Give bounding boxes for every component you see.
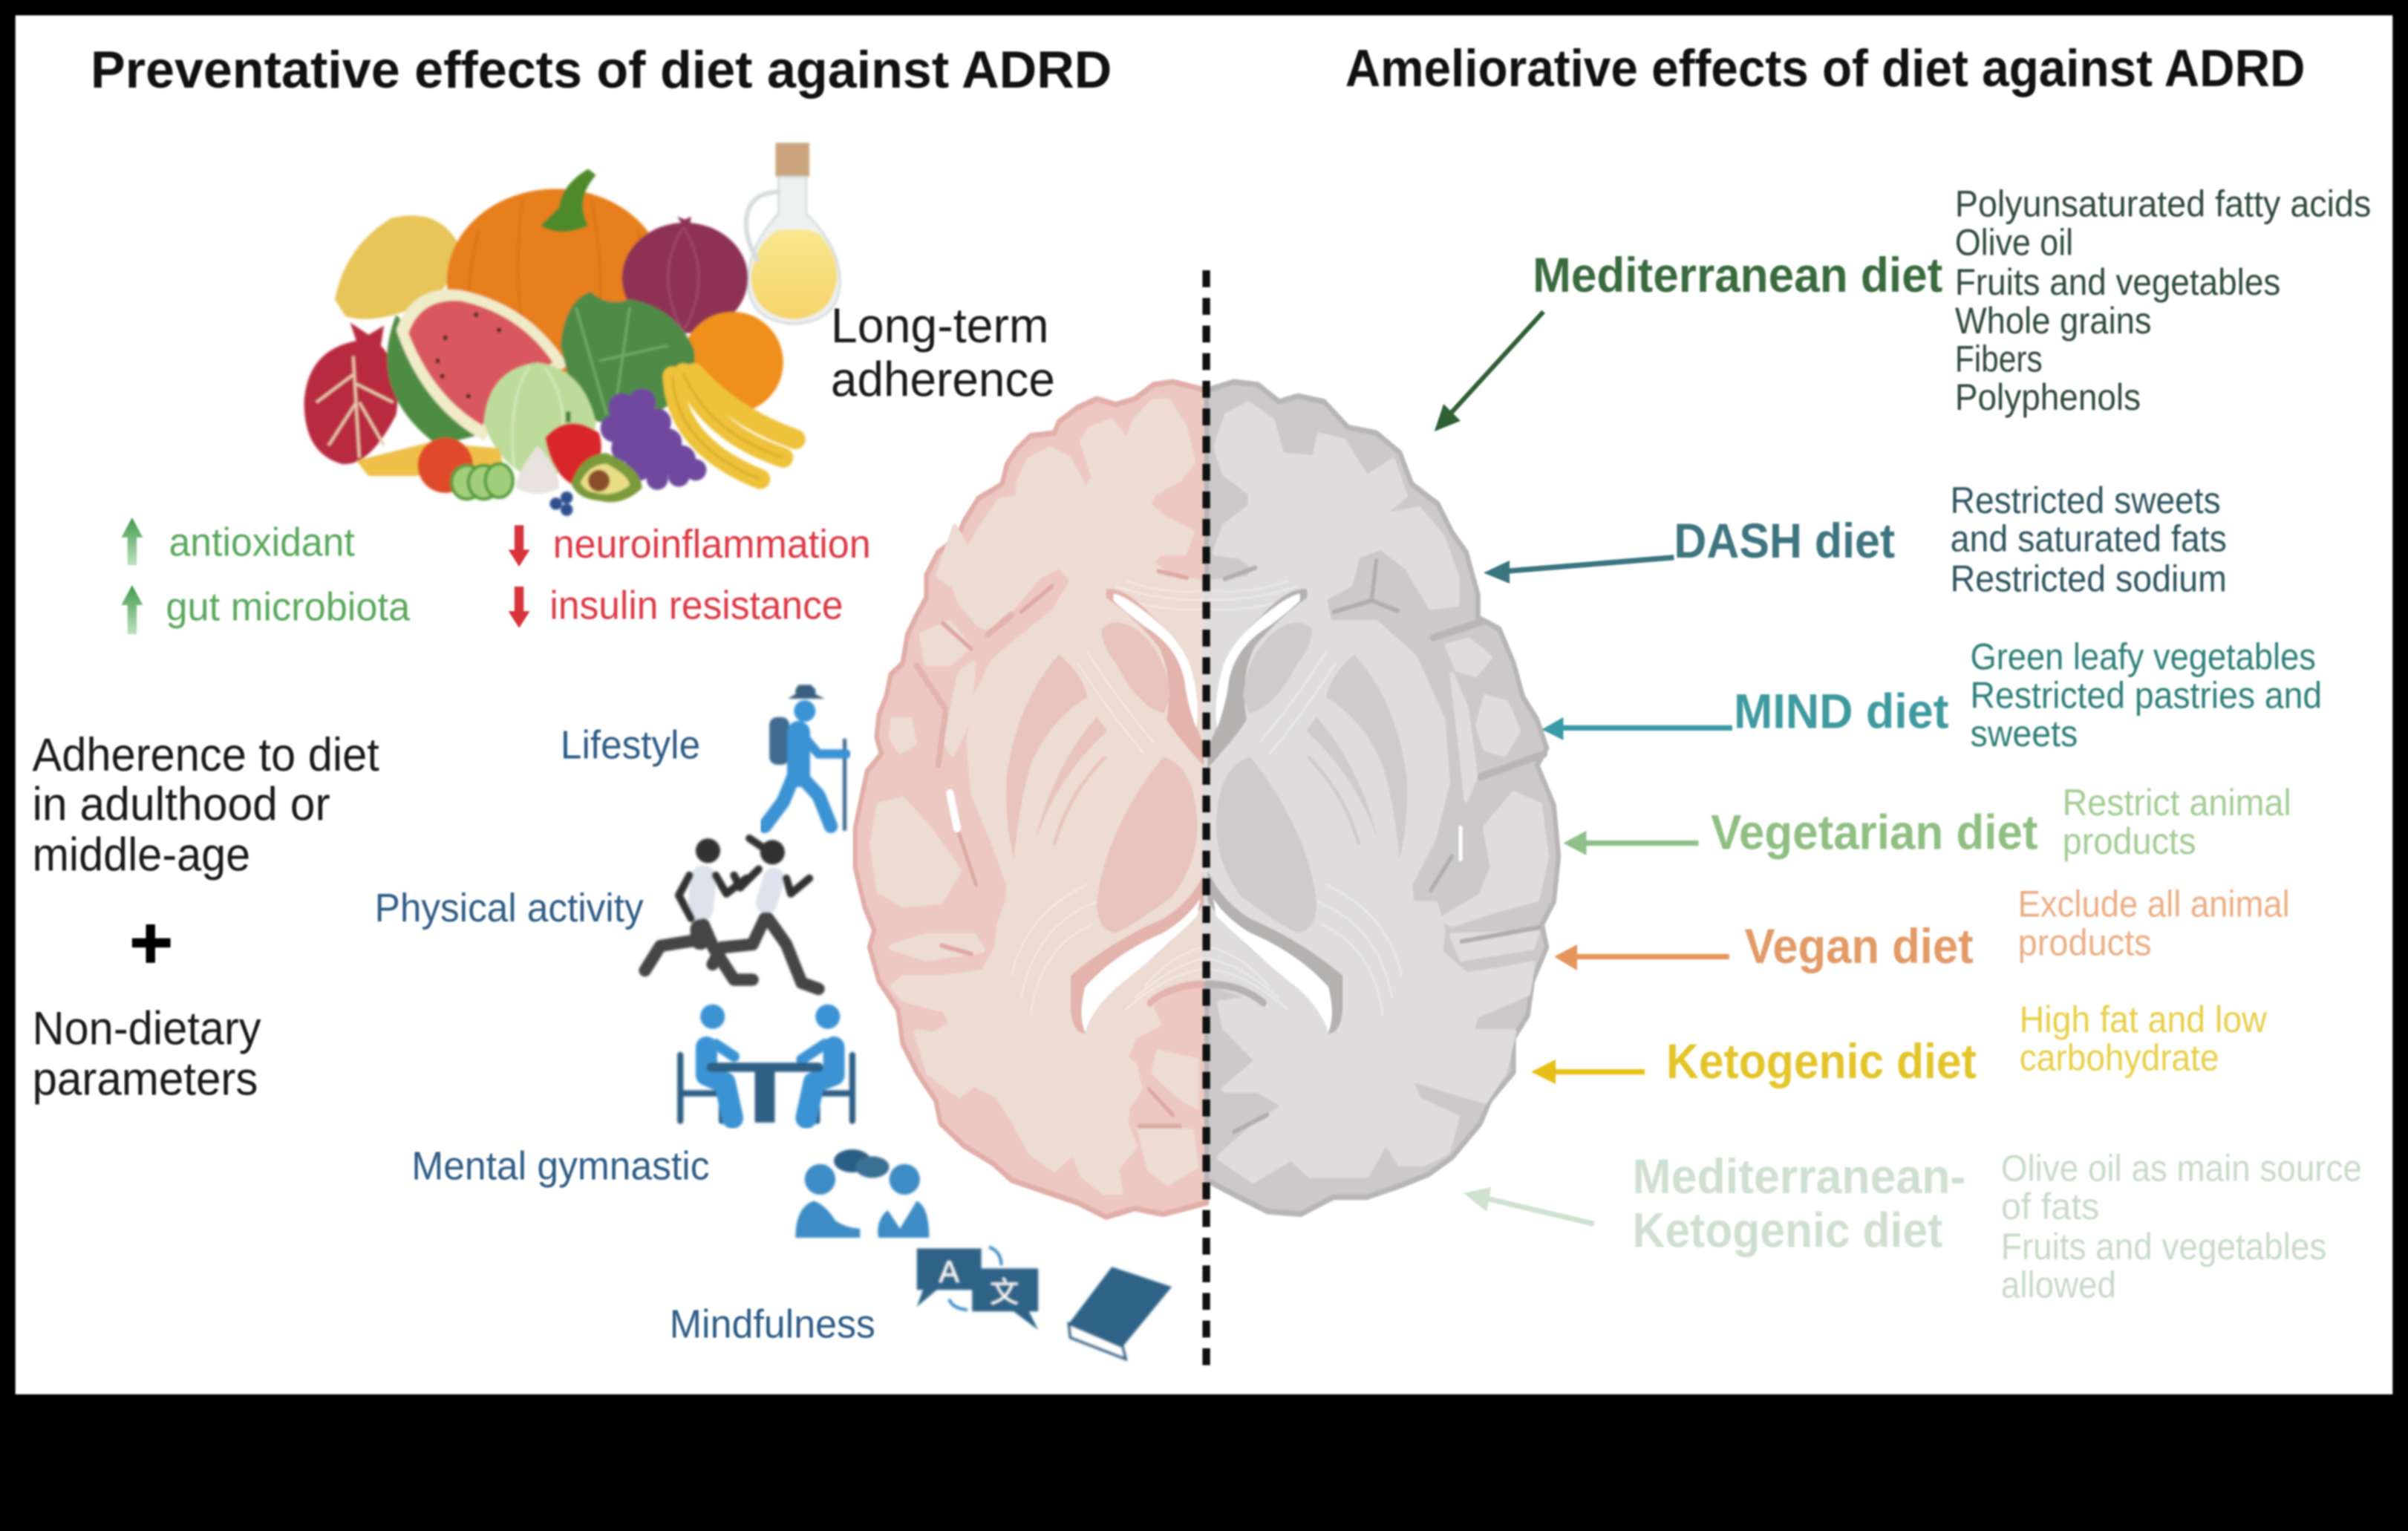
diet: Mediterranean: Fibers	[1955, 339, 2043, 380]
icon: two runners	[645, 838, 818, 989]
diet: Ketogenic	[1531, 999, 2267, 1089]
label: lifestyle: Lifestyle	[561, 723, 700, 768]
benefit: gut microbiota up: gut microbiota	[166, 585, 410, 630]
benefit: antioxidant up: antioxidant	[169, 520, 355, 565]
diet: Mediterranean-Ketogenic	[1464, 1147, 2362, 1306]
diet: Vegan: Exclude all animal	[2018, 884, 2290, 925]
heading: ameliorative effects: Ameliorative effects of diet against ADRD	[1345, 39, 2305, 97]
diet: Ketogenic: High fat and low	[2020, 999, 2267, 1040]
diet: Vegan	[1554, 884, 2290, 974]
illustration: fruit and vegetable pile with olive oil	[304, 143, 840, 516]
diet: Mediterranean-Ketogenic: of fats	[2001, 1186, 2099, 1227]
plus sign	[132, 924, 171, 963]
diet: Mediterranean-Ketogenic: Ketogenic diet	[1633, 1203, 1942, 1258]
brain: right hemisphere (grey)	[1207, 382, 1559, 1214]
text: non-dietary parameters: parameters	[32, 1054, 258, 1106]
diet: DASH	[1484, 480, 2227, 599]
icon: translation bubbles	[917, 1247, 1038, 1330]
diet: Mediterranean-Ketogenic: Olive oil as main source	[2001, 1147, 2362, 1189]
benefit: insulin resistance down: insulin resistance	[549, 583, 843, 627]
text: non-dietary parameters	[32, 1002, 261, 1106]
diet: MIND: Green leafy vegetables	[1971, 636, 2316, 678]
diet: MIND	[1542, 636, 2322, 754]
diet: Vegan: products	[2018, 921, 2152, 963]
diet: Mediterranean-Ketogenic: allowed	[2001, 1264, 2116, 1306]
icon: hiker	[765, 685, 846, 831]
text: adherence to diet: middle-age	[32, 829, 250, 881]
diet: Mediterranean-Ketogenic: Mediterranean-	[1633, 1149, 1965, 1204]
diet: Mediterranean: Mediterranean diet	[1533, 248, 1942, 303]
label: physical activity: Physical activity	[375, 886, 644, 930]
icon: book	[1068, 1267, 1172, 1359]
dashed divider	[1204, 270, 1208, 1371]
heading: preventative effects: Preventative effects of diet against ADRD	[91, 40, 1112, 99]
icon: two people at table	[680, 1005, 852, 1123]
benefit: neuroinflammation down: neuroinflammation	[553, 522, 871, 567]
diet: DASH: Restricted sweets	[1951, 480, 2221, 521]
icon: conversation	[795, 1149, 929, 1238]
diet: MIND: Restricted pastries and	[1971, 674, 2322, 716]
diet: Mediterranean: Polyunsaturated fatty acids	[1955, 183, 2371, 225]
icon: translation bubbles: A	[939, 1255, 959, 1289]
diet: Mediterranean-Ketogenic: Fruits and vegetables	[2001, 1226, 2326, 1267]
diet: Vegetarian: Restrict animal	[2063, 782, 2291, 823]
label: mental gymnastic: Mental gymnastic	[411, 1143, 710, 1188]
diet: Vegan: Vegan diet	[1745, 919, 1974, 974]
text: non-dietary parameters: Non-dietary	[32, 1002, 261, 1054]
diet: MIND: sweets	[1971, 713, 2078, 754]
brain: left hemisphere (pink)	[855, 382, 1207, 1217]
text: adherence to diet	[32, 729, 379, 881]
diet: Vegetarian: products	[2063, 820, 2196, 862]
label: mindfulness: Mindfulness	[670, 1302, 875, 1346]
text: long-term adherence: Long-term	[831, 298, 1049, 353]
diet: Mediterranean: Olive oil	[1955, 221, 2073, 263]
diet: Ketogenic: carbohydrate	[2020, 1037, 2219, 1079]
diet: DASH: and saturated fats	[1951, 518, 2227, 559]
diet: Mediterranean: Fruits and vegetables	[1955, 261, 2280, 303]
diet: Mediterranean: Polyphenols	[1955, 376, 2141, 418]
text: long-term adherence	[831, 298, 1055, 408]
diet: Vegetarian: Vegetarian diet	[1711, 806, 2038, 861]
diet: MIND: MIND diet	[1734, 684, 1949, 739]
text: adherence to diet: in adulthood or	[32, 778, 330, 830]
diet: Mediterranean: Whole grains	[1955, 300, 2152, 342]
diet: Vegetarian	[1563, 782, 2291, 862]
diet: Mediterranean	[1435, 183, 2371, 431]
diet: DASH: Restricted sodium	[1951, 558, 2227, 599]
text: adherence to diet: Adherence to diet	[32, 729, 379, 781]
diet: Ketogenic: Ketogenic diet	[1666, 1034, 1977, 1089]
diet: DASH: DASH diet	[1674, 514, 1895, 569]
icon: translation bubbles: 文	[990, 1276, 1019, 1309]
text: long-term adherence: adherence	[831, 353, 1055, 408]
